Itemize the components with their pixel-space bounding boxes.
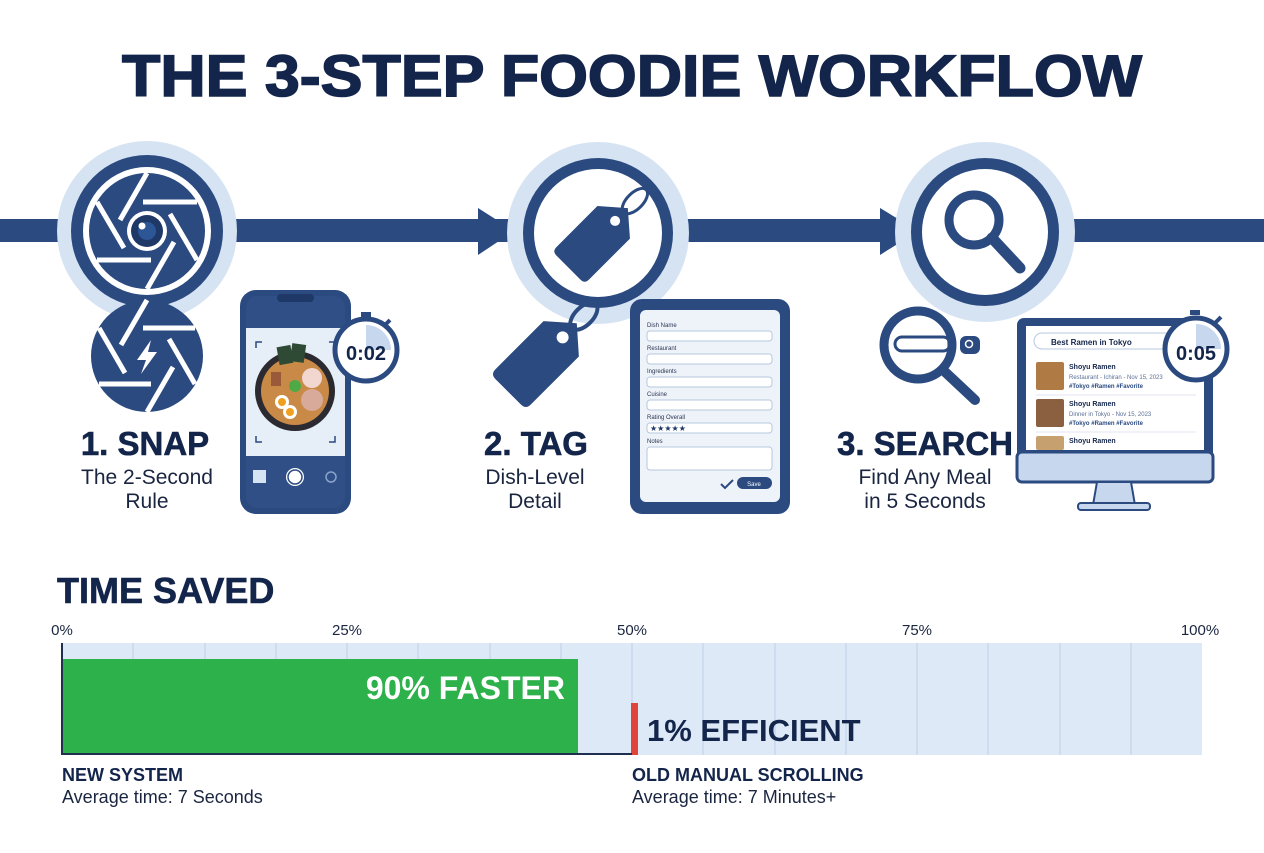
label: old manual scrolling: OLD MANUAL SCROLLING	[632, 765, 864, 785]
label: new system	[62, 765, 263, 807]
axis labels: 100%	[1181, 622, 1219, 639]
step 3 subtitle	[858, 466, 992, 513]
stopwatch 0:05	[1165, 310, 1227, 380]
step 2 subtitle: Dish-Level	[485, 466, 585, 489]
section heading: time saved: TIME SAVED	[57, 570, 274, 611]
bar: old manual	[631, 703, 861, 755]
title: THE 3-STEP FOODIE WORKFLOW	[122, 44, 1142, 109]
step 3 subtitle: Find Any Meal	[858, 466, 992, 489]
bar: new system: 90% FASTER	[366, 670, 565, 706]
stopwatch 0:02: 0:02	[346, 343, 386, 365]
tablet form: Restaurant	[647, 346, 677, 352]
tablet form	[630, 299, 790, 514]
monitor with search results: #Tokyo #Ramen #Favorite	[1069, 384, 1144, 390]
label: old manual scrolling: Average time: 7 Minutes+	[632, 787, 836, 807]
label: new system: Average time: 7 Seconds	[62, 787, 263, 807]
step 3 subtitle: in 5 Seconds	[864, 490, 986, 513]
arrow 2	[880, 208, 918, 255]
bar: old manual: 1% EFFICIENT	[647, 713, 861, 748]
icon: tag	[491, 286, 614, 409]
step 2 subtitle: Detail	[508, 490, 562, 513]
label: old manual scrolling	[632, 765, 864, 807]
tablet form: ★★★★★	[650, 424, 686, 433]
tablet form: Cuisine	[647, 392, 668, 398]
step 2 circle: tag	[507, 142, 689, 324]
phone mockup	[240, 290, 351, 514]
tablet form: Notes	[647, 439, 663, 445]
axis labels: 50%	[617, 622, 647, 639]
step 1 subtitle: Rule	[125, 490, 169, 513]
step 1 subtitle	[81, 466, 213, 513]
axis labels: 0%	[51, 622, 73, 639]
monitor with search results: Restaurant - Ichiran - Nov 15, 2023	[1069, 375, 1163, 381]
monitor with search results: Best Ramen in Tokyo	[1051, 338, 1132, 347]
step 1 heading: 1. SNAP	[81, 425, 209, 462]
monitor with search results: Shoyu Ramen	[1069, 401, 1116, 408]
step 1 subtitle: The 2-Second	[81, 466, 213, 489]
axis labels	[51, 622, 1219, 639]
bar chart	[62, 643, 1202, 755]
step 2 subtitle	[485, 466, 585, 513]
step 3 circle: magnifier	[895, 142, 1075, 322]
monitor with search results	[1017, 318, 1213, 510]
axis labels: 25%	[332, 622, 362, 639]
axis labels: 75%	[902, 622, 932, 639]
stopwatch 0:05: 0:05	[1176, 343, 1216, 365]
step 3 heading: 3. SEARCH	[837, 425, 1013, 462]
icon: search magnifier	[884, 311, 980, 400]
tablet form: Dish Name	[647, 323, 677, 329]
bar: new system	[62, 659, 578, 755]
arrow 1	[478, 208, 514, 255]
stopwatch 0:02	[335, 312, 397, 381]
tablet form: Save	[747, 482, 761, 488]
monitor with search results: Shoyu Ramen	[1069, 438, 1116, 445]
step 1 circle: aperture camera	[57, 141, 237, 321]
tablet form: Ingredients	[647, 369, 677, 375]
step 2 heading: 2. TAG	[484, 425, 588, 462]
monitor with search results: #Tokyo #Ramen #Favorite	[1069, 421, 1144, 427]
timeline bar	[0, 219, 1264, 242]
monitor with search results: Dinner in Tokyo - Nov 15, 2023	[1069, 412, 1152, 418]
label: new system: NEW SYSTEM	[62, 765, 183, 785]
monitor with search results: Shoyu Ramen	[1069, 364, 1116, 371]
tablet form: Rating Overall	[647, 415, 685, 421]
icon: shutter with bolt	[91, 300, 203, 412]
